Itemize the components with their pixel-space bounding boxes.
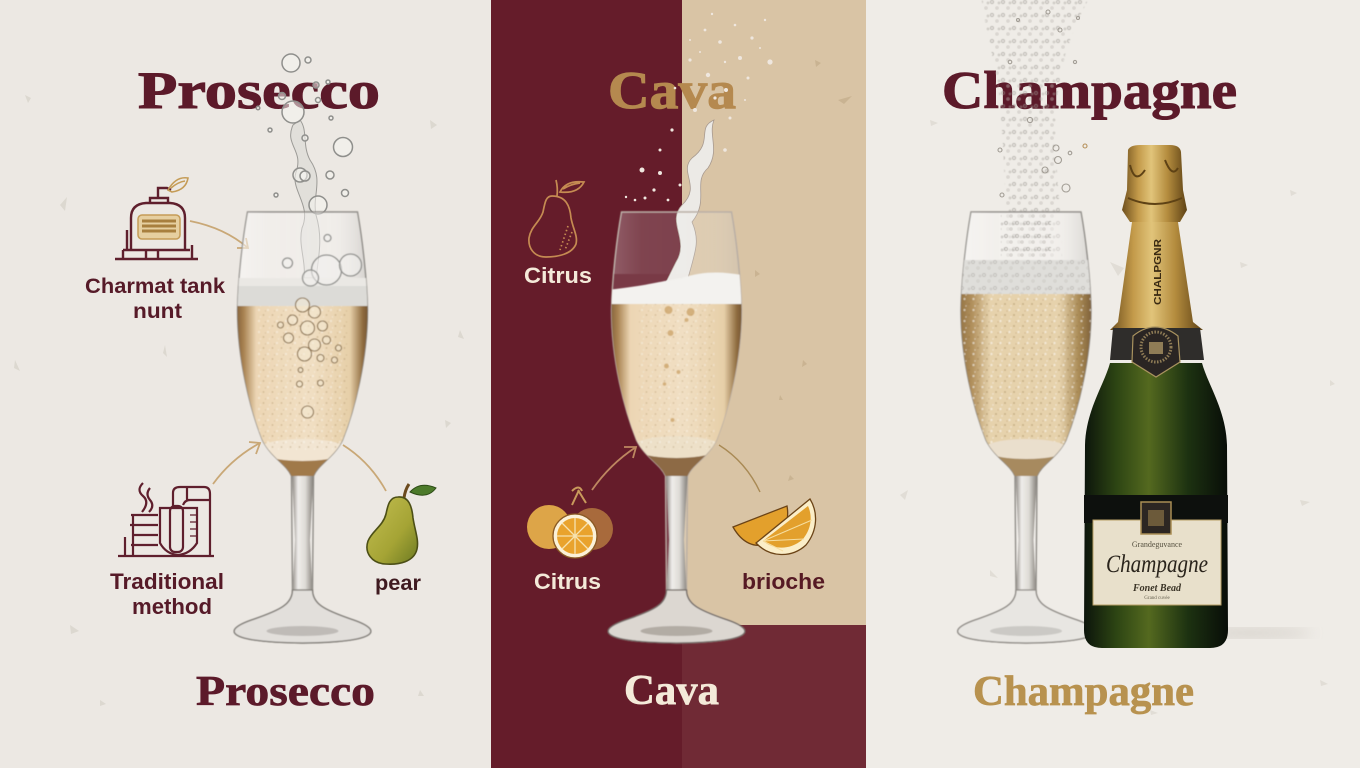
label: bottle paper: Champagne xyxy=(1106,551,1208,578)
icon: Charmat tank xyxy=(115,178,198,259)
label: bottle paper xyxy=(1093,502,1221,605)
label: Traditional method: method xyxy=(132,594,212,619)
label: Citrus lower: Citrus xyxy=(534,569,601,594)
bottom label: Prosecco: Prosecco xyxy=(196,669,375,715)
title: Champagne: Champagne xyxy=(942,62,1237,120)
icon: traditional method equipment xyxy=(118,483,214,556)
splash: Champagne bubbles xyxy=(982,0,1088,258)
icon: orange wedges xyxy=(733,499,816,555)
icon: citrus fruits xyxy=(527,488,613,558)
shadow: bottle xyxy=(1188,628,1312,638)
arrow: brioche to glass xyxy=(719,445,760,492)
panel: Cava xyxy=(491,0,866,768)
splash: Prosecco bubbles xyxy=(256,54,352,278)
bottom label: Cava: Cava xyxy=(624,668,719,714)
title: Cava: Cava xyxy=(608,62,736,120)
title: Prosecco: Prosecco xyxy=(138,62,380,120)
panel: Champagne xyxy=(900,0,1334,715)
label: bottle paper: Grand cuvée xyxy=(1144,596,1170,601)
bottom label: Champagne: Champagne xyxy=(973,669,1194,715)
panel: Prosecco xyxy=(14,53,464,706)
bottle: Champagne xyxy=(1084,145,1228,648)
label: Traditional method: Traditional xyxy=(110,569,224,594)
text: neck lettering: CHALPGNR xyxy=(1153,238,1164,305)
glass: Prosecco xyxy=(232,212,372,643)
label: Charmat tank nunt: nunt xyxy=(133,300,182,323)
arrow: pear to glass xyxy=(343,445,386,491)
arrow: tank to glass xyxy=(190,221,248,248)
label: bottle paper: Grandeguvance xyxy=(1132,540,1183,549)
glass: Cava xyxy=(606,212,746,643)
arrow: method to glass xyxy=(213,442,260,484)
label: Traditional method xyxy=(110,569,224,619)
label: brioche: brioche xyxy=(742,569,825,594)
label: bottle paper: Fonet Bead xyxy=(1132,583,1182,594)
label: Citrus upper: Citrus xyxy=(524,263,592,288)
glass: Champagne xyxy=(956,212,1096,643)
icon: pear outline xyxy=(529,180,584,257)
icon: pear xyxy=(367,484,436,564)
label: Charmat tank nunt xyxy=(85,275,225,323)
label: pear: pear xyxy=(375,572,421,595)
splash: Cava spray xyxy=(625,13,773,282)
arrow: citrus to glass xyxy=(592,447,636,490)
label: Charmat tank nunt: Charmat tank xyxy=(85,275,225,298)
